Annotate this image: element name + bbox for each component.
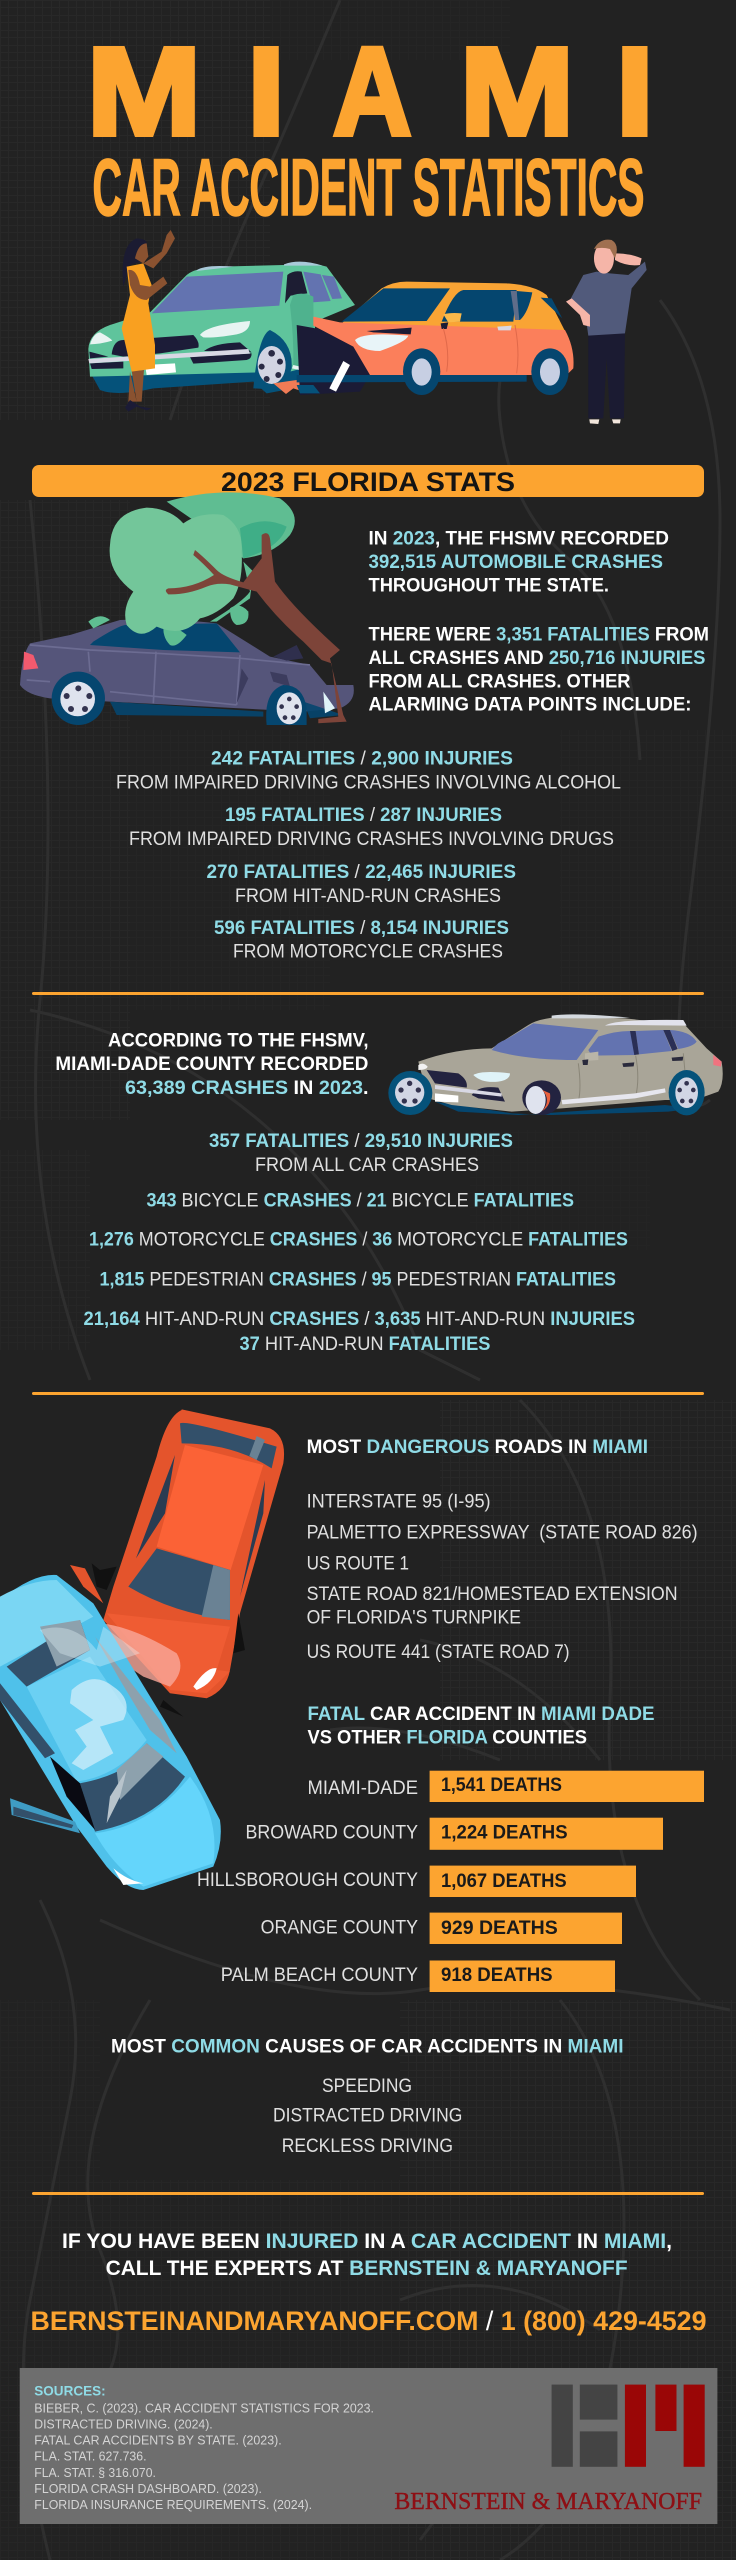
Miami-Dade stats list: 1,815 PEDESTRIAN CRASHES / 95 PEDESTRIAN FATALITIES [100, 1270, 616, 1291]
dangerous roads list: PALMETTO EXPRESSWAY (STATE ROAD 826) [307, 1523, 698, 1544]
dangerous roads heading: MOST DANGEROUS ROADS IN MIAMI [307, 1436, 648, 1458]
illustration: green car [88, 262, 355, 394]
intro text block: ALARMING DATA POINTS INCLUDE: [368, 694, 692, 716]
dangerous roads list: US ROUTE 441 (STATE ROAD 7) [307, 1642, 570, 1663]
bar chart: deaths by county: HILLSBOROUGH COUNTY [197, 1870, 418, 1891]
title: MIAMI: I [616, 21, 654, 161]
Florida stats list: 270 FATALITIES / 22,465 INJURIES [206, 862, 516, 883]
illustration: car crushed by tree [20, 492, 354, 725]
logo: Bernstein & Maryanoff [394, 2385, 705, 2515]
bar chart: deaths by county: 1,067 DEATHS [441, 1871, 567, 1892]
Florida stats list: 596 FATALITIES / 8,154 INJURIES [214, 918, 509, 939]
sources list [34, 2383, 374, 2512]
sources list: FATAL CAR ACCIDENTS BY STATE. (2023). [34, 2433, 282, 2448]
common causes list [273, 2076, 462, 2157]
illustration: woman [122, 230, 175, 412]
Miami-Dade intro text: MIAMI-DADE COUNTY RECORDED [55, 1053, 368, 1075]
fatal accidents heading [308, 1703, 655, 1748]
title: MIAMI [87, 21, 654, 161]
sources list: FLORIDA INSURANCE REQUIREMENTS. (2024). [34, 2497, 312, 2512]
illustration: man [566, 240, 647, 424]
Miami-Dade stats list [84, 1131, 635, 1355]
website and phone: BERNSTEINANDMARYANOFF.COM / 1 (800) 429-4529 [30, 2306, 706, 2336]
Florida stats list [116, 749, 621, 963]
Florida stats list: 195 FATALITIES / 287 INJURIES [225, 805, 502, 826]
illustration: orange car [297, 282, 574, 395]
title: MIAMI: M [460, 21, 574, 161]
logo: Bernstein & Maryanoff: BERNSTEIN & MARYANOFF [394, 2489, 702, 2515]
title: MIAMI: A [333, 21, 412, 161]
bar chart: deaths by county: MIAMI-DADE [308, 1778, 418, 1799]
call to action [62, 2230, 672, 2280]
banner: 2023 Florida stats [32, 465, 704, 497]
dangerous roads list: US ROUTE 1 [307, 1553, 409, 1574]
bar chart: deaths by county: 918 DEATHS [441, 1965, 553, 1986]
Miami-Dade intro text: ACCORDING TO THE FHSMV, [108, 1030, 368, 1052]
sources list: DISTRACTED DRIVING. (2024). [34, 2417, 213, 2432]
intro text block: ALL CRASHES AND 250,716 INJURIES [368, 647, 706, 669]
common causes list: RECKLESS DRIVING [282, 2136, 453, 2157]
intro text block: THROUGHOUT THE STATE. [368, 574, 609, 596]
common causes list: SPEEDING [322, 2076, 412, 2097]
call to action: IF YOU HAVE BEEN INJURED IN A CAR ACCIDENT IN MIAMI, [62, 2230, 672, 2253]
bar chart: deaths by county: ORANGE COUNTY [261, 1918, 418, 1939]
call to action: CALL THE EXPERTS AT BERNSTEIN & MARYANOFF [106, 2257, 628, 2280]
bar chart: deaths by county: PALM BEACH COUNTY [221, 1965, 418, 1986]
sources list: FLA. STAT. 627.736. [34, 2449, 146, 2464]
intro text block: 392,515 AUTOMOBILE CRASHES [368, 551, 663, 573]
Miami-Dade stats list: 21,164 HIT-AND-RUN CRASHES / 3,635 HIT-AND-RUN INJURIES [84, 1309, 635, 1330]
illustration: gray car [388, 1014, 723, 1115]
intro text block: FROM ALL CRASHES. OTHER [368, 670, 630, 692]
Florida stats list: FROM IMPAIRED DRIVING CRASHES INVOLVING ALCOHOL [116, 773, 621, 794]
fatal accidents heading: VS OTHER FLORIDA COUNTIES [308, 1726, 587, 1748]
title: MIAMI: I [247, 21, 285, 161]
Florida stats list: FROM IMPAIRED DRIVING CRASHES INVOLVING DRUGS [129, 829, 614, 850]
panel: sources and logo [20, 2368, 717, 2524]
Miami-Dade stats list: 357 FATALITIES / 29,510 INJURIES [209, 1131, 513, 1152]
sources list: FLORIDA CRASH DASHBOARD. (2023). [34, 2481, 262, 2496]
Miami-Dade stats list: FROM ALL CAR CRASHES [255, 1155, 479, 1176]
title: MIAMI: M [87, 21, 201, 161]
illustration: top-view car crash [0, 1409, 284, 1890]
Miami-Dade stats list: 1,276 MOTORCYCLE CRASHES / 36 MOTORCYCLE FATALITIES [89, 1230, 628, 1251]
intro text block: IN 2023, THE FHSMV RECORDED [368, 528, 669, 550]
banner: 2023 Florida stats: 2023 FLORIDA STATS [221, 467, 515, 497]
Florida stats list: 242 FATALITIES / 2,900 INJURIES [211, 749, 513, 770]
Miami-Dade stats list: 37 HIT-AND-RUN FATALITIES [240, 1334, 490, 1355]
dangerous roads list [307, 1492, 698, 1663]
intro text block: THERE WERE 3,351 FATALITIES FROM [368, 624, 709, 646]
Florida stats list: FROM MOTORCYCLE CRASHES [233, 942, 503, 963]
Miami-Dade intro text [55, 1030, 369, 1099]
bar chart: deaths by county: 1,541 DEATHS [441, 1775, 562, 1796]
dangerous roads list: OF FLORIDA'S TURNPIKE [307, 1608, 521, 1629]
bar chart: deaths by county: 929 DEATHS [441, 1918, 558, 1939]
Miami-Dade stats list: 343 BICYCLE CRASHES / 21 BICYCLE FATALITIES [146, 1191, 574, 1212]
bar chart: deaths by county [197, 1771, 704, 1992]
bar chart: deaths by county: 1,224 DEATHS [441, 1823, 568, 1844]
Florida stats list: FROM HIT-AND-RUN CRASHES [235, 886, 501, 907]
Miami-Dade intro text: 63,389 CRASHES IN 2023. [125, 1077, 368, 1099]
dangerous roads list: STATE ROAD 821/HOMESTEAD EXTENSION [307, 1584, 678, 1605]
common causes list: DISTRACTED DRIVING [273, 2105, 462, 2126]
sources list: SOURCES: [34, 2383, 106, 2399]
sources list: BIEBER, C. (2023). CAR ACCIDENT STATISTICS FOR 2023. [34, 2400, 374, 2416]
intro text block [368, 528, 709, 716]
dangerous roads list: INTERSTATE 95 (I-95) [307, 1492, 491, 1513]
bar chart: deaths by county: BROWARD COUNTY [246, 1823, 418, 1844]
fatal accidents heading: FATAL CAR ACCIDENT IN MIAMI DADE [308, 1703, 655, 1725]
sources list: FLA. STAT. § 316.070. [34, 2465, 156, 2480]
common causes heading: MOST COMMON CAUSES OF CAR ACCIDENTS IN MIAMI [111, 2036, 624, 2058]
